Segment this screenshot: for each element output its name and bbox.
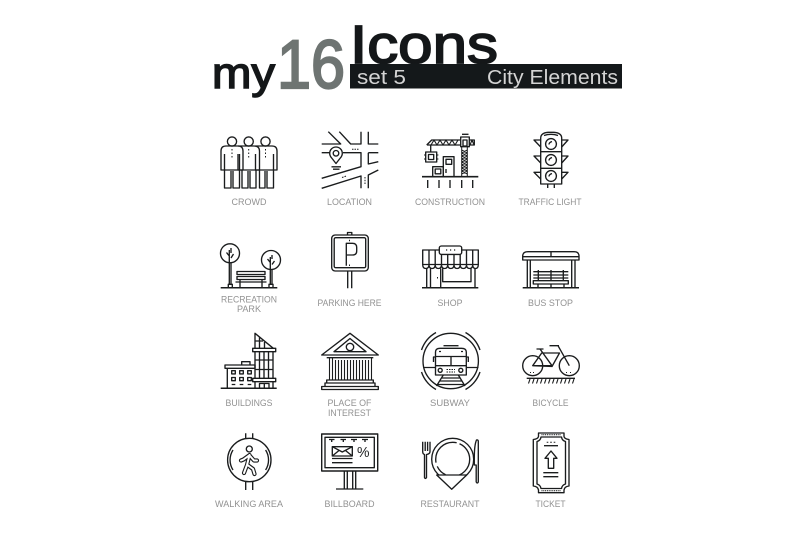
- label: recreation park: RECREATION: [221, 294, 277, 306]
- label: ticket: TICKET: [536, 499, 566, 510]
- billboard percent sign: %: [357, 444, 370, 461]
- icon: parking sign: [332, 232, 368, 288]
- label: place of interest: [328, 398, 372, 419]
- label: recreation park: [221, 294, 277, 315]
- label: walking area: WALKING AREA: [215, 499, 284, 510]
- icon: bus stop: [523, 252, 579, 288]
- label: subway: SUBWAY: [430, 398, 471, 409]
- label: traffic light: TRAFFIC LIGHT: [518, 197, 582, 208]
- icon: walking area sign: [228, 433, 271, 490]
- icon: shop: [422, 246, 478, 288]
- label: shop: SHOP: [438, 298, 462, 309]
- icon: billboard: [322, 434, 378, 489]
- title number: 16: 16: [277, 26, 345, 103]
- icon: construction crane: [422, 134, 478, 188]
- icon: restaurant: [423, 438, 478, 489]
- subtitle bar: set 5: [357, 67, 406, 89]
- label: recreation park: PARK: [237, 304, 262, 315]
- title word: my: my: [212, 49, 275, 98]
- label: place of interest: PLACE OF: [328, 398, 372, 409]
- icon: bicycle: [523, 346, 579, 384]
- label: bicycle: BICYCLE: [532, 398, 568, 409]
- icon: subway: [422, 332, 480, 390]
- icon: recreation park: [220, 244, 280, 288]
- subtitle bar: [350, 64, 622, 89]
- label: bus stop: BUS STOP: [528, 298, 573, 309]
- label: place of interest: INTEREST: [328, 408, 371, 419]
- title word: Icons: Icons: [350, 15, 498, 75]
- label: parking here: PARKING HERE: [318, 298, 382, 309]
- subtitle bar: City Elements: [487, 67, 618, 89]
- label: construction: CONSTRUCTION: [415, 197, 485, 208]
- title lockup: [212, 15, 622, 103]
- icon: crowd: [221, 137, 277, 188]
- icon: traffic light: [534, 132, 568, 188]
- label: crowd: CROWD: [232, 197, 267, 208]
- icon: location map: [322, 132, 378, 188]
- icon: buildings: [221, 333, 277, 388]
- label: billboard: BILLBOARD: [324, 499, 375, 510]
- icon: ticket: [533, 433, 569, 493]
- icon: place of interest: [322, 333, 378, 390]
- label: buildings: BUILDINGS: [226, 398, 272, 409]
- label: restaurant: RESTAURANT: [420, 499, 480, 510]
- label: location: LOCATION: [327, 197, 372, 208]
